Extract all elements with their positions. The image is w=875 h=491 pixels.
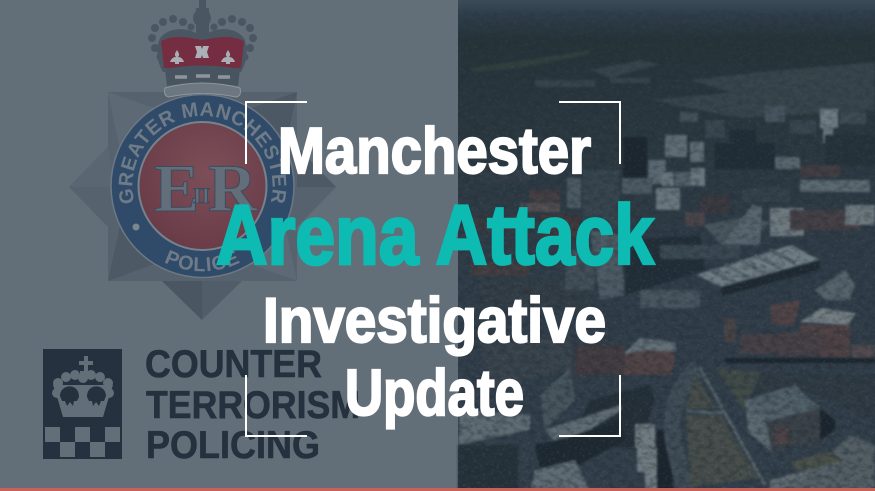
- logo wordmark: POLICING: [146, 424, 320, 467]
- icon: EIIR cypher: E: [154, 150, 199, 226]
- icon: EIIR cypher: R: [208, 150, 258, 226]
- title line: Update: Update: [345, 356, 524, 429]
- panel: left grey background: [0, 0, 458, 491]
- building blocks upper: [470, 106, 875, 245]
- mid buildings: [458, 230, 875, 491]
- title line: Investigative: Investigative: [263, 286, 606, 356]
- icon: badge ring with lettering: POLICE: [165, 250, 240, 272]
- distant field and haze: [470, 50, 590, 72]
- station roof: [696, 245, 820, 287]
- icon: crown and chequer square: [43, 349, 122, 459]
- icon: crown: [148, 0, 257, 97]
- icon: badge ring with lettering: [110, 94, 295, 278]
- roads, lawns and office block: [672, 368, 875, 491]
- logo wordmark: [145, 343, 360, 467]
- logo wordmark: COUNTER: [145, 343, 322, 386]
- icon: badge ring with lettering: GREATER MANCHESTER: [118, 102, 286, 204]
- icon: EIIR cypher: II: [193, 183, 210, 208]
- title line: Manchester: Manchester: [278, 114, 591, 187]
- icon: EIIR cypher: [154, 150, 258, 226]
- panel: aerial city photograph: [458, 0, 875, 491]
- logo wordmark: TERRORISM: [146, 384, 360, 427]
- title line: Arena Attack: Arena Attack: [216, 188, 654, 282]
- bottom accent bar: [0, 488, 875, 491]
- icon: badge star: [69, 92, 336, 320]
- corner frame brackets: [246, 102, 620, 436]
- title block: [216, 114, 654, 429]
- counter terrorism policing logo: [43, 343, 360, 467]
- photo texture: [458, 76, 875, 488]
- police badge: [70, 0, 336, 320]
